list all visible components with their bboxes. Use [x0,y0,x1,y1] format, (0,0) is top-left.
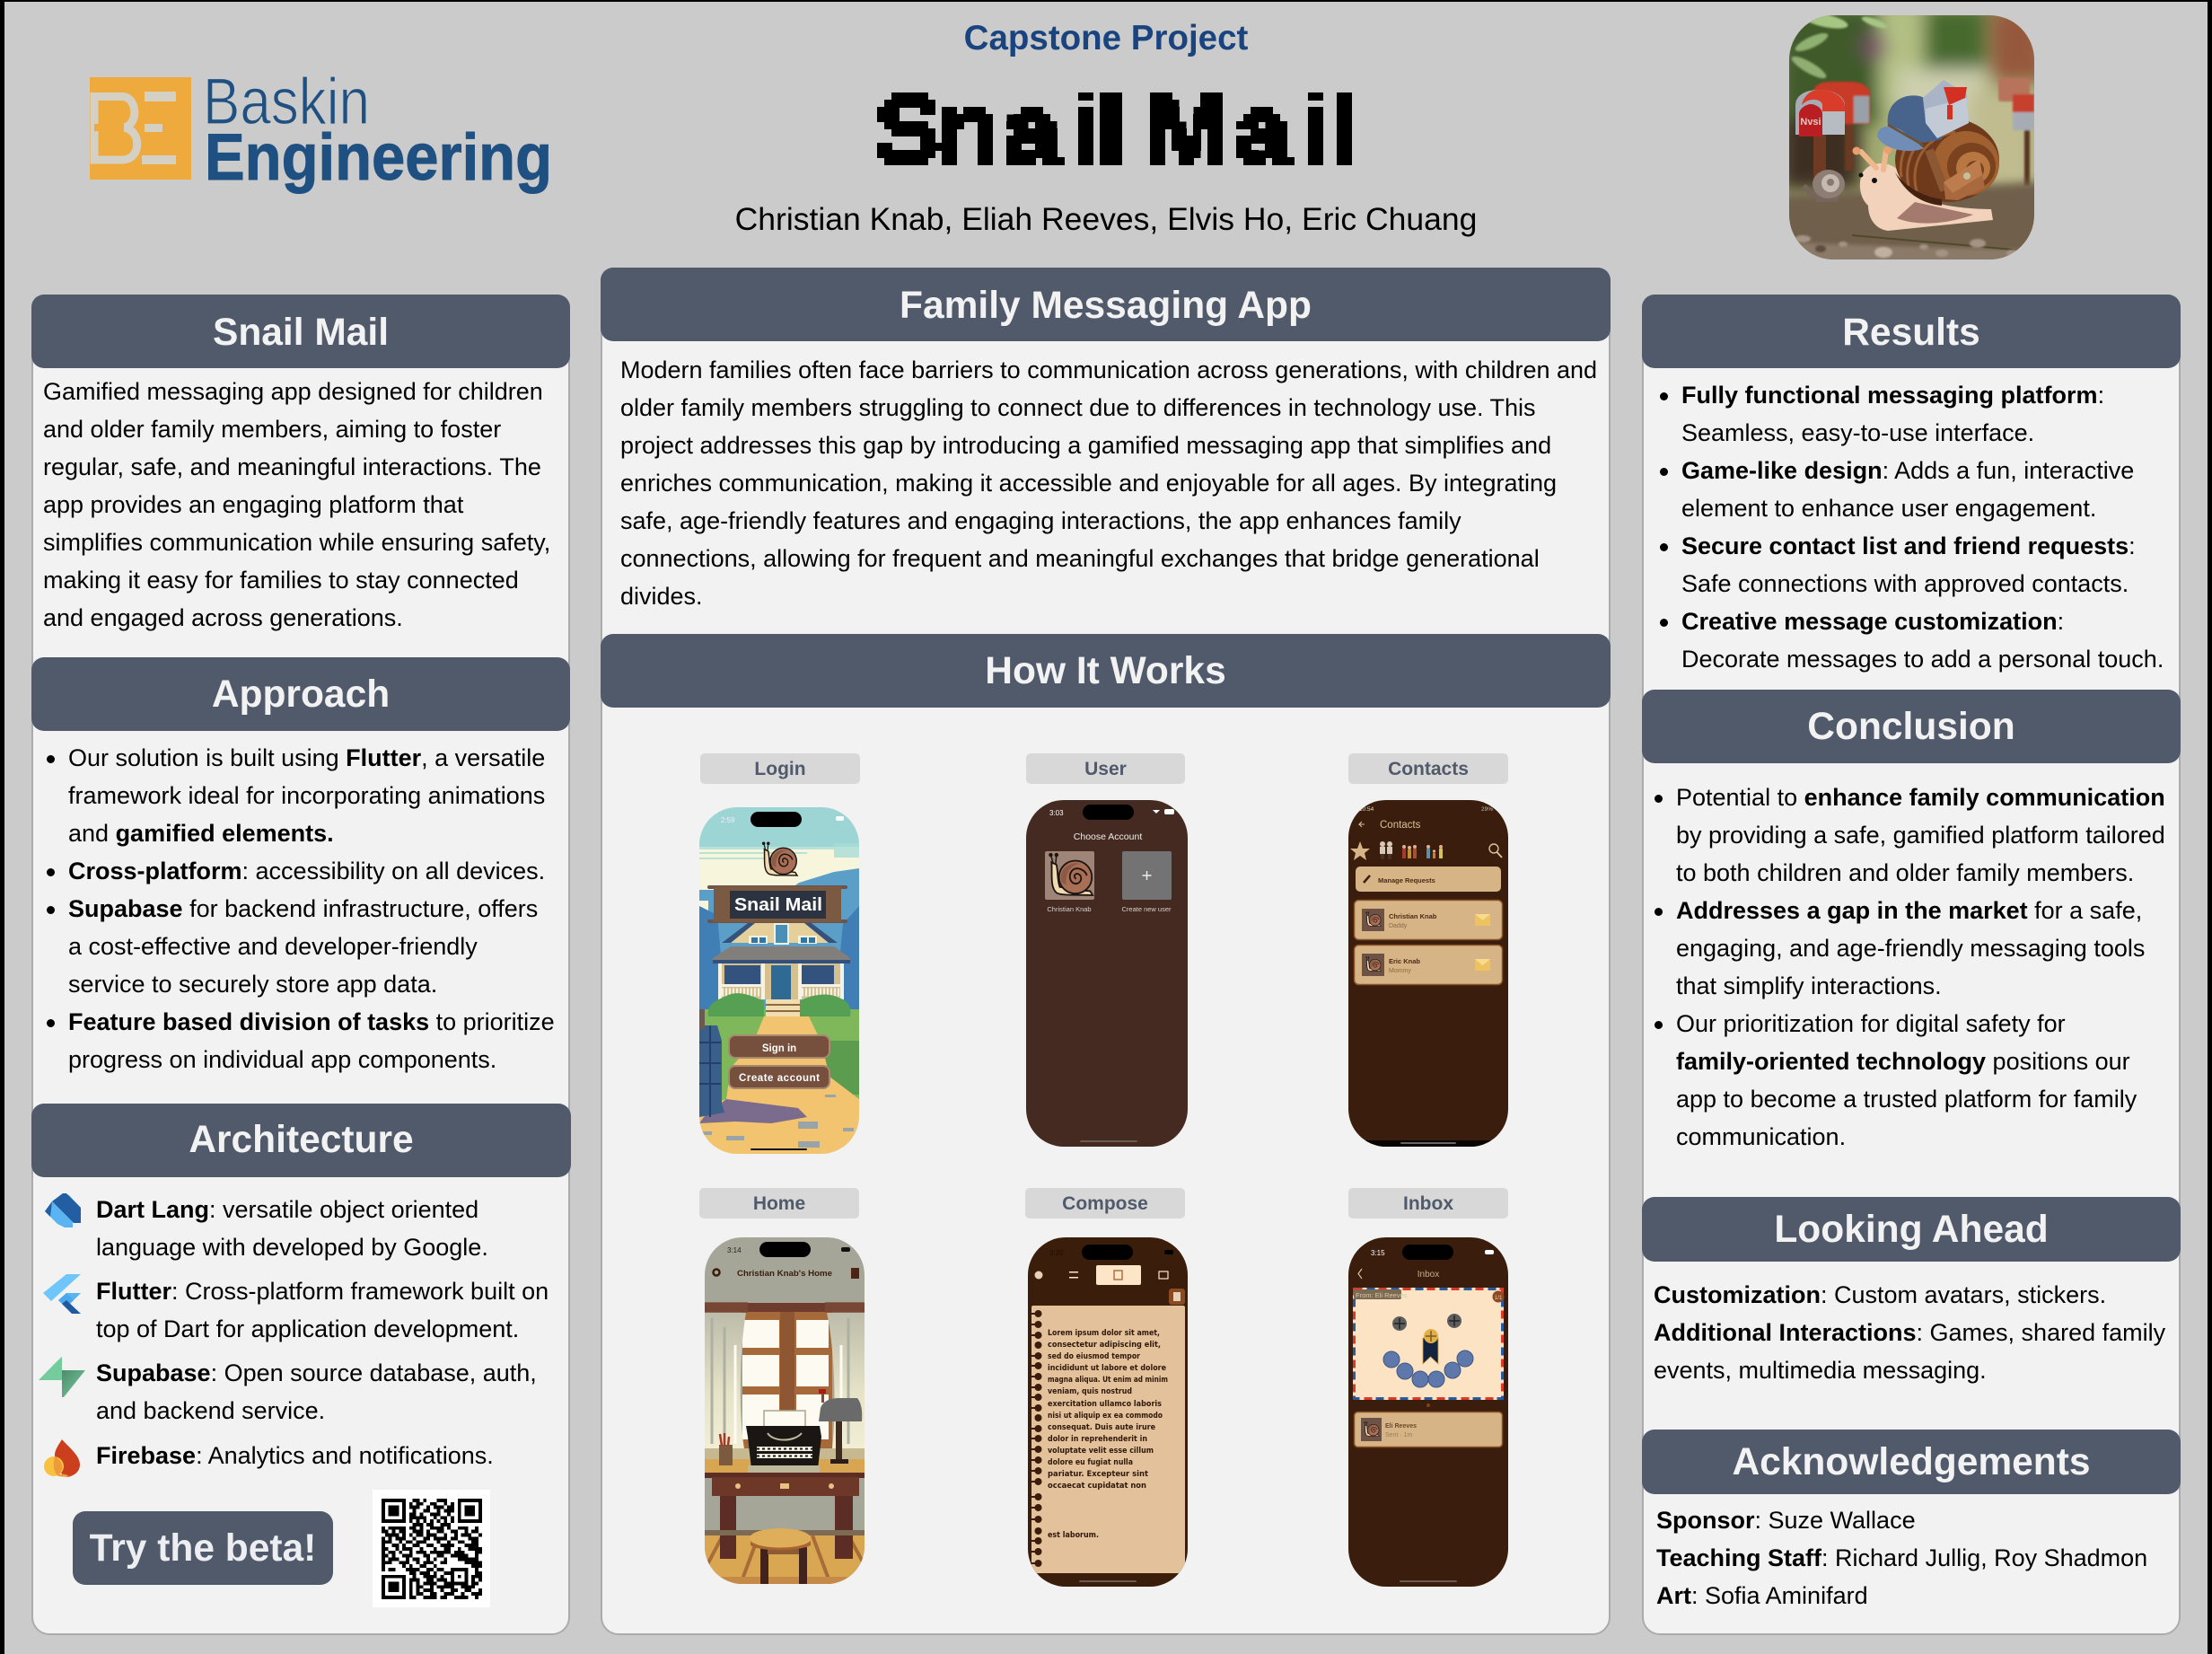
avatar tile [1045,851,1094,913]
mailbox front: Nvsi [1800,117,1821,128]
heading: Family Messaging App: Family Messaging App [900,285,1312,327]
new user tile [1121,851,1172,913]
envelope: From: Eli Reeves [1356,1291,1408,1299]
contact card: Eric: Eric Knab [1389,957,1420,965]
floor [705,1535,865,1584]
stone wall [699,1025,724,1117]
ground [1780,181,2043,268]
new user tile: Create new user [1121,905,1172,913]
phone: User screen [1026,800,1188,1147]
snail body [1860,163,1993,231]
text: Conclusion bullets: by providing a safe, gamified platform tailored [1676,822,2165,849]
text: intro paragraph: divides. [620,583,703,610]
text: Acknowledgements: Art: Sofia Aminifard [1656,1582,1868,1609]
heading: Acknowledgements [1642,1430,2181,1494]
text: Approach bullets: a cost-effective and developer-friendly [68,933,478,960]
label: Login [700,753,860,784]
paper: dolore eu fugiat nulla [1048,1458,1133,1467]
icon: Flutter [43,1274,81,1314]
text: Flutter: top of Dart for application development. [96,1315,519,1342]
text: Results bullets: Game-like design: Adds a fun, interactive [1681,457,2134,484]
label: Inbox: Inbox [1403,1193,1453,1214]
smiley stickers [1383,1314,1473,1387]
small snail [1804,170,1845,199]
authors: Christian Knab, Eliah Reeves, Elvis Ho, Eric Chuang [735,201,1477,237]
button: Sign in: Sign in [762,1043,796,1054]
cap [1877,95,1943,151]
desk [705,1448,865,1559]
text: Results bullets: Seamless, easy-to-use interface. [1681,419,2034,446]
label: User [1026,753,1185,784]
label: Login: Login [754,759,806,779]
paper: voluptate velit esse cillum [1048,1447,1154,1456]
text: Approach bullets: Feature based division of tasks to prioritize [68,1008,555,1035]
heading: How It Works [601,634,1611,708]
mailbox lamp [819,1389,862,1464]
manage requests [1356,867,1501,892]
phone: Contacts screen [1348,800,1508,1147]
label: Compose: Compose [1062,1193,1148,1214]
heading: Snail Mail [31,295,570,368]
phone: Inbox screen: 3:15 [1371,1249,1385,1257]
text: Conclusion bullets: Addresses a gap in the market for a safe, [1676,897,2142,924]
phone: Compose screen: 3:20 [1049,1249,1064,1257]
phone: Login screen [699,807,859,1154]
text: Approach bullets: Supabase for backend infrastructure, offers [68,895,538,922]
text: Approach bullets: progress on individual app components. [68,1046,496,1073]
mountains [699,868,859,1016]
snail shell [1895,118,1999,206]
label: Compose [1025,1188,1185,1219]
bag [1929,150,1985,200]
sender card: Sent · 1m [1385,1432,1413,1438]
heading: Snail Mail: Snail Mail [213,312,389,354]
text: Conclusion bullets: Potential to enhance family communication [1676,784,2165,811]
text: Firebase: Firebase: Analytics and notifications. [96,1442,494,1469]
sender card: Eli Reeves [1385,1423,1417,1430]
icon: settings gear [713,1270,720,1275]
logo: Baskin Engineering [90,72,552,194]
text: Flutter: Flutter: Cross-platform framework built on [96,1278,549,1305]
text: Approach bullets: service to securely store app data. [68,971,437,998]
text: Conclusion bullets [1655,784,2165,1150]
heading: How It Works: How It Works [985,650,1226,692]
QR code [373,1490,490,1607]
text: Supabase [96,1359,537,1424]
paper: magna aliqua. Ut enim ad minim [1048,1376,1168,1385]
button: Sign in [729,1035,830,1058]
compose toolbar [1034,1265,1185,1305]
paper: occaecat cupidatat non [1048,1482,1146,1491]
heading: Conclusion: Conclusion [1807,706,2015,748]
contact card: Christian [1354,900,1503,939]
text: Conclusion bullets: to both children and older family members. [1676,859,2134,886]
text: Results bullets: Decorate messages to add a personal touch. [1681,646,2164,673]
text: Snail Mail summary: and older family members, aiming to foster [43,416,501,443]
text: Results bullets: Safe connections with approved contacts. [1681,570,2129,597]
text: Acknowledgements: Sponsor: Suze Wallace [1656,1507,1916,1534]
sender card [1354,1412,1503,1447]
text: intro paragraph: older family members struggling to connect due to differences in technology use. This [620,394,1536,421]
phone: Home screen: Christian Knab's Home [737,1269,832,1279]
text: Snail Mail summary: simplifies communication while ensuring safety, [43,529,550,556]
paper: nisi ut aliquip ex ea commodo [1048,1412,1163,1421]
house [708,923,850,1016]
window [742,1308,832,1452]
snail [762,841,797,875]
phone: Home screen [705,1237,865,1584]
text: Conclusion bullets: that simplify interactions. [1676,972,1942,999]
text: Conclusion bullets: family-oriented technology positions our [1676,1048,2130,1075]
heading: Architecture: Architecture [189,1119,414,1161]
category icons [1350,841,1502,860]
contact card: Christian: Christian Knab [1389,912,1437,920]
label: Home [699,1188,859,1219]
envelope: 1/1 [1494,1295,1503,1301]
text: Looking Ahead: events, multimedia messaging. [1654,1357,1987,1384]
envelope [1353,1288,1505,1400]
stool [750,1528,811,1584]
text: Looking Ahead [1654,1281,2165,1384]
text: Results bullets: element to enhance user engagement. [1681,495,2096,522]
phone: Inbox screen [1348,1237,1508,1587]
icon: Supabase [39,1357,85,1397]
heading: Family Messaging App [601,268,1611,341]
icon: snail mascot photo [1789,15,2034,260]
sand path [699,1016,859,1154]
contact card: Christian: Daddy [1389,923,1408,929]
text: Snail Mail summary: app provides an engaging platform that [43,491,463,518]
heading: Looking Ahead: Looking Ahead [1774,1209,2049,1251]
heading: Approach [31,657,570,731]
button: Create account [729,1066,830,1088]
icon: BE mark [90,77,191,180]
text: Results bullets: Fully functional messaging platform: [1681,382,2104,409]
button: Create account: Create account [739,1073,820,1084]
banner: Snail Mail [734,895,822,915]
panel: right column [1642,295,2181,1635]
label: Inbox [1348,1188,1508,1219]
label: User: User [1084,759,1127,779]
text: Acknowledgements [1656,1507,2147,1609]
button: Try the beta [73,1511,333,1585]
heading: Results: Results [1842,312,1980,354]
label: Home: Home [753,1193,805,1214]
mailbox front [1795,90,1845,190]
typewriter [746,1411,821,1473]
text: Approach bullets: Cross-platform: accessibility on all devices. [68,858,545,884]
text: Conclusion bullets: communication. [1676,1123,1846,1150]
text: Snail Mail summary: and engaged across generations. [43,604,403,631]
text: Approach bullets: and gamified elements. [68,820,334,847]
contact card: Eric [1354,945,1503,984]
text: Dart: Dart Lang: versatile object oriented [96,1196,478,1223]
grass [699,1009,859,1108]
phone: User screen: Choose Account [1074,831,1142,842]
label: Contacts: Contacts [1388,759,1469,779]
text: Results bullets [1660,382,2164,673]
text: intro paragraph: enriches communication, making it accessible and enjoyable for all ages. By integrating [620,470,1557,497]
banner [707,885,847,923]
label: Contacts [1348,753,1508,784]
icon: Dart [45,1193,81,1227]
icon: Firebase [44,1439,80,1477]
paper [1031,1306,1185,1573]
avatar tile: Christian Knab [1047,905,1092,913]
phone: User screen: 3:03 [1049,809,1064,817]
phone: Home screen: 3:14 [727,1246,742,1254]
heading: Conclusion [1642,690,2181,763]
text: Snail Mail summary: regular, safe, and meaningful interactions. The [43,453,541,480]
text: Flutter [96,1278,549,1342]
text: Conclusion bullets: app to become a trusted platform for family [1676,1086,2137,1113]
mini mailbox on shell [1923,80,1969,138]
icon: background mailbox [1813,82,1870,171]
wordmark [203,66,552,194]
panel: middle column [601,268,1611,1635]
paper: veniam, quis nostrud [1048,1387,1132,1396]
phone: Compose screen [1028,1237,1188,1587]
text: Snail Mail summary [43,378,550,631]
text: Approach bullets [47,744,555,1073]
text: Looking Ahead: Additional Interactions: Games, shared family [1654,1319,2165,1346]
header subtitle: Capstone Project [964,19,1248,57]
paper: consectetur adipiscing elit, [1048,1341,1161,1350]
text: Conclusion bullets: Our prioritization for digital safety for [1676,1010,2066,1037]
text: Acknowledgements: Teaching Staff: Richard Jullig, Roy Shadmon [1656,1544,2147,1571]
heading: Acknowledgements: Acknowledgements [1732,1441,2091,1483]
text: Dart [96,1196,488,1261]
pencil cup [719,1433,733,1465]
text: Looking Ahead: Customization: Custom avatars, stickers. [1654,1281,2106,1308]
curtains [705,1313,746,1448]
text: Conclusion bullets: engaging, and age-friendly messaging tools [1676,935,2145,962]
contact card: Eric: Mommy [1389,968,1411,974]
text: Approach bullets: Our solution is built using Flutter, a versatile [68,744,545,771]
paper: dolor in reprehenderit in [1048,1435,1147,1444]
phone: Login screen: 2:59 [721,816,735,824]
paper: incididunt ut labore et dolore [1048,1364,1166,1373]
text: intro paragraph: Modern families often face barriers to communication across generations, with children and [620,356,1597,383]
text: intro paragraph: project addresses this gap by introducing a gamified messaging app that simplifies and [620,432,1551,459]
text: Dart: language with developed by Google. [96,1234,488,1261]
text: Snail Mail summary: Gamified messaging app designed for children [43,378,543,405]
text: intro paragraph: connections, allowing for frequent and meaningful exchanges that bridge generational [620,545,1540,572]
phone: Inbox screen: Inbox [1418,1270,1439,1280]
paper: consequat. Duis aute irure [1048,1423,1155,1432]
phone: Contacts screen: Contacts [1380,820,1421,831]
paper: Lorem ipsum dolor sit amet, [1048,1329,1160,1338]
text: Results bullets: Creative message customization: [1681,608,2064,635]
paper: pariatur. Excepteur sint [1048,1470,1148,1479]
heading: Results [1642,295,2181,368]
button: Try the beta: Try the beta! [90,1527,316,1570]
text: intro paragraph [620,356,1597,610]
text: Supabase: Supabase: Open source database, auth, [96,1359,537,1386]
text: Snail Mail summary: making it easy for families to stay connected [43,567,519,594]
paper: est laborum. [1048,1531,1099,1540]
heading: Architecture [31,1104,571,1177]
panel: left column [31,295,570,1635]
text: Supabase: and backend service. [96,1397,325,1424]
heading: Approach: Approach [212,673,390,716]
manage requests: Manage Requests [1378,876,1435,884]
paper: exercitation ullamco laboris [1048,1400,1162,1409]
icon: contacts book [851,1268,859,1279]
heading: Looking Ahead [1642,1197,2181,1262]
phone: Contacts screen: 10:54 [1359,806,1374,813]
paper: sed do eiusmod tempor [1048,1352,1141,1361]
phone: Contacts screen: 29% [1481,806,1493,813]
text: Approach bullets: framework ideal for incorporating animations [68,782,545,809]
text: intro paragraph: safe, age-friendly features and engaging interactions, the app enhances family [620,507,1462,534]
text: Results bullets: Secure contact list and friend requests: [1681,532,2136,559]
